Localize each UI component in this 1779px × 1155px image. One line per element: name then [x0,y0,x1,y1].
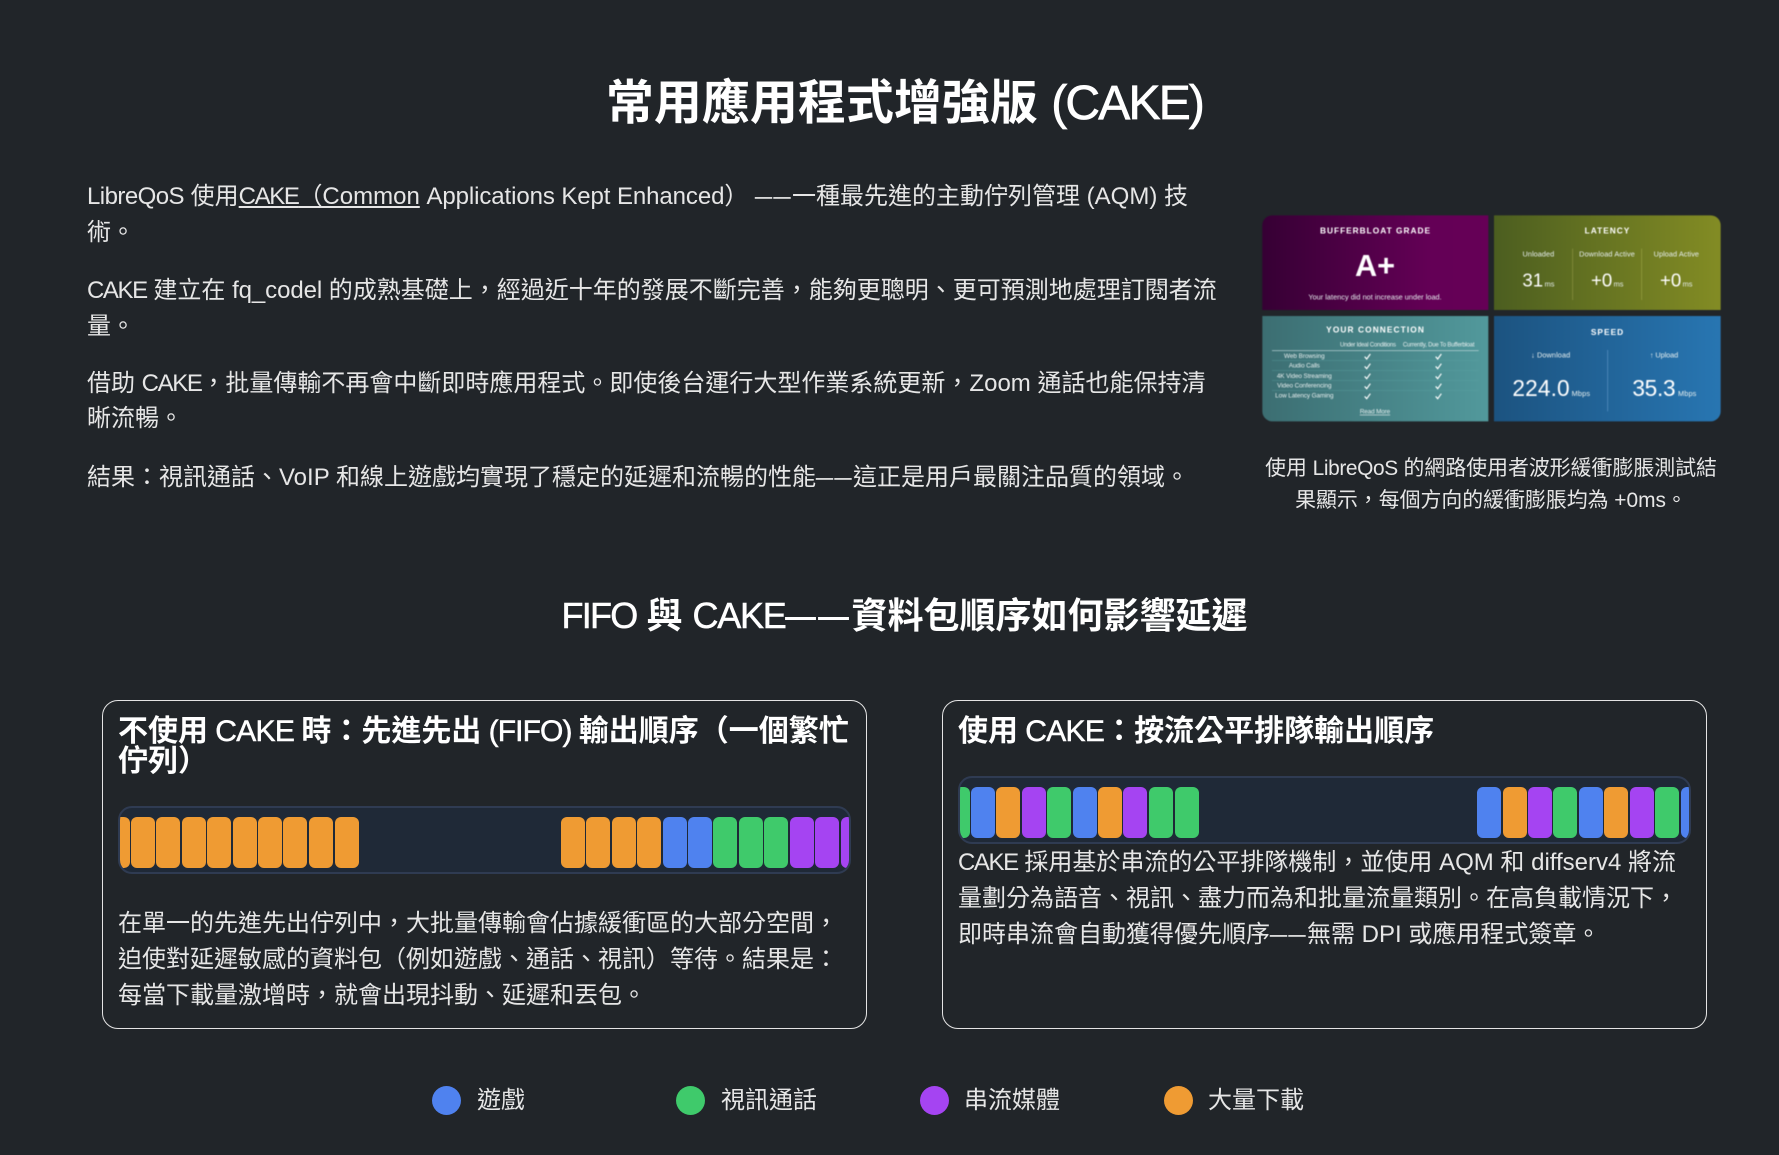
queue bar: FIFO [118,806,851,874]
waveform bufferbloat result image [1262,214,1722,422]
legend item: video calls: 視訊通話 [721,1087,817,1114]
text block: introduction [87,183,1217,491]
panel description: CAKE: 量劃分為語音、視訊、盡力而為和批量流量類別。在高負載情況下， [958,885,1678,912]
card: your connection: Video Conferencing [1277,383,1332,390]
legend item: bulk download [1164,1086,1304,1115]
legend item: gaming [432,1086,525,1115]
section heading: FIFO 與 CAKE——資料包順序如何影響延遲 [561,595,1248,636]
card: your connection: Currently, Due To Bufferbloat [1403,343,1475,349]
card: latency: +0 [1660,270,1681,291]
panel description: FIFO: 每當下載量激增時，就會出現抖動、延遲和丟包。 [118,982,646,1009]
card: your connection: Audio Calls [1289,363,1320,370]
text block: introduction: 量。 [87,313,135,340]
card: your connection: Low Latency Gaming [1275,393,1334,400]
panel description: FIFO [118,910,838,1009]
card: latency: +0 [1591,270,1612,291]
card: bufferbloat grade [1262,215,1488,310]
card: speed: ↓ Download [1531,350,1570,359]
card: latency: Unloaded [1522,250,1554,259]
card: latency: Download Active [1579,250,1635,259]
panel description: CAKE: 即時串流會自動獲得優先順序——無需 DPI 或應用程式簽章。 [958,921,1600,948]
text block: introduction: 術。 [87,219,135,246]
legend [432,1086,1304,1115]
card: speed: Mbps [1572,389,1590,398]
card: speed: SPEED [1591,327,1623,337]
panel description: FIFO: 在單一的先進先出佇列中，大批量傳輸會佔據緩衝區的大部分空間， [118,910,838,937]
card: latency: 31 [1522,270,1543,291]
legend item: video calls [676,1086,817,1115]
panel description: CAKE [958,849,1678,948]
card: speed: ↑ Upload [1650,350,1678,359]
card: latency [1494,215,1721,310]
image caption: 使用 LibreQoS 的網路使用者波形緩衝膨脹測試結 [1265,457,1717,480]
legend item: gaming: 遊戲 [477,1087,525,1114]
text block: introduction: 借助 CAKE，批量傳輸不再會中斷即時應用程式。即使後台運行大型作業系統更新，Zoom 通話也能保持清 [87,370,1205,397]
card: latency: ms [1614,280,1624,289]
image caption: 果顯示，每個方向的緩衝膨脹均為 +0ms。 [1295,489,1687,512]
panel heading: FIFO: 佇列） [118,745,208,778]
card: latency: ms [1545,280,1555,289]
card: latency: Upload Active [1654,250,1699,259]
card: speed: Mbps [1678,389,1697,398]
panel: with CAKE [942,700,1707,1029]
legend item: bulk download: 大量下載 [1208,1087,1304,1114]
card: speed [1494,316,1721,421]
legend item: streaming media [920,1086,1060,1115]
panel heading: FIFO [118,714,849,778]
card: latency: LATENCY [1585,226,1630,236]
legend item: streaming media: 串流媒體 [964,1087,1060,1114]
panel heading: CAKE: 使用 CAKE：按流公平排隊輸出順序 [958,715,1434,748]
card: bufferbloat grade: BUFFERBLOAT GRADE [1320,226,1430,236]
card: bufferbloat grade: Your latency did not increase under load. [1308,292,1442,301]
card: your connection: Read More [1360,409,1391,416]
card: your connection: 4K Video Streaming [1277,373,1332,380]
text block: introduction: LibreQoS 使用CAKE（Common Applications Kept Enhanced） ——一種最先進的主動佇列管理 (AQM) 技 [87,183,1188,210]
title: 常用應用程式增強版 (CAKE) [606,77,1203,130]
card: bufferbloat grade: A+ [1355,249,1395,283]
card: your connection [1262,316,1488,421]
text block: introduction: 結果：視訊通話、VoIP 和線上遊戲均實現了穩定的延遲和流暢的性能——這正是用戶最關注品質的領域。 [87,464,1189,491]
card: your connection: Under Ideal Conditions [1340,343,1396,349]
card: your connection: Web Browsing [1284,353,1325,360]
panel heading: FIFO: 不使用 CAKE 時：先進先出 (FIFO) 輸出順序（一個繁忙 [118,715,849,748]
panel description: CAKE: CAKE 採用基於串流的公平排隊機制，並使用 AQM 和 diffserv4 將流 [958,849,1676,876]
text block: introduction: 晰流暢。 [87,405,183,432]
queue bar: CAKE [958,776,1691,844]
panel: without CAKE [102,700,867,1029]
card: speed: 224.0 [1512,375,1570,401]
image caption [1265,457,1717,512]
card: your connection: YOUR CONNECTION [1326,325,1424,335]
card: speed: 35.3 [1632,375,1676,401]
text block: introduction: CAKE 建立在 fq_codel 的成熟基礎上，經過近十年的發展不斷完善，能夠更聰明、更可預測地處理訂閱者流 [87,277,1217,304]
card: latency: ms [1683,280,1693,289]
panel description: FIFO: 迫使對延遲敏感的資料包（例如遊戲、通話、視訊）等待。結果是： [118,946,838,973]
